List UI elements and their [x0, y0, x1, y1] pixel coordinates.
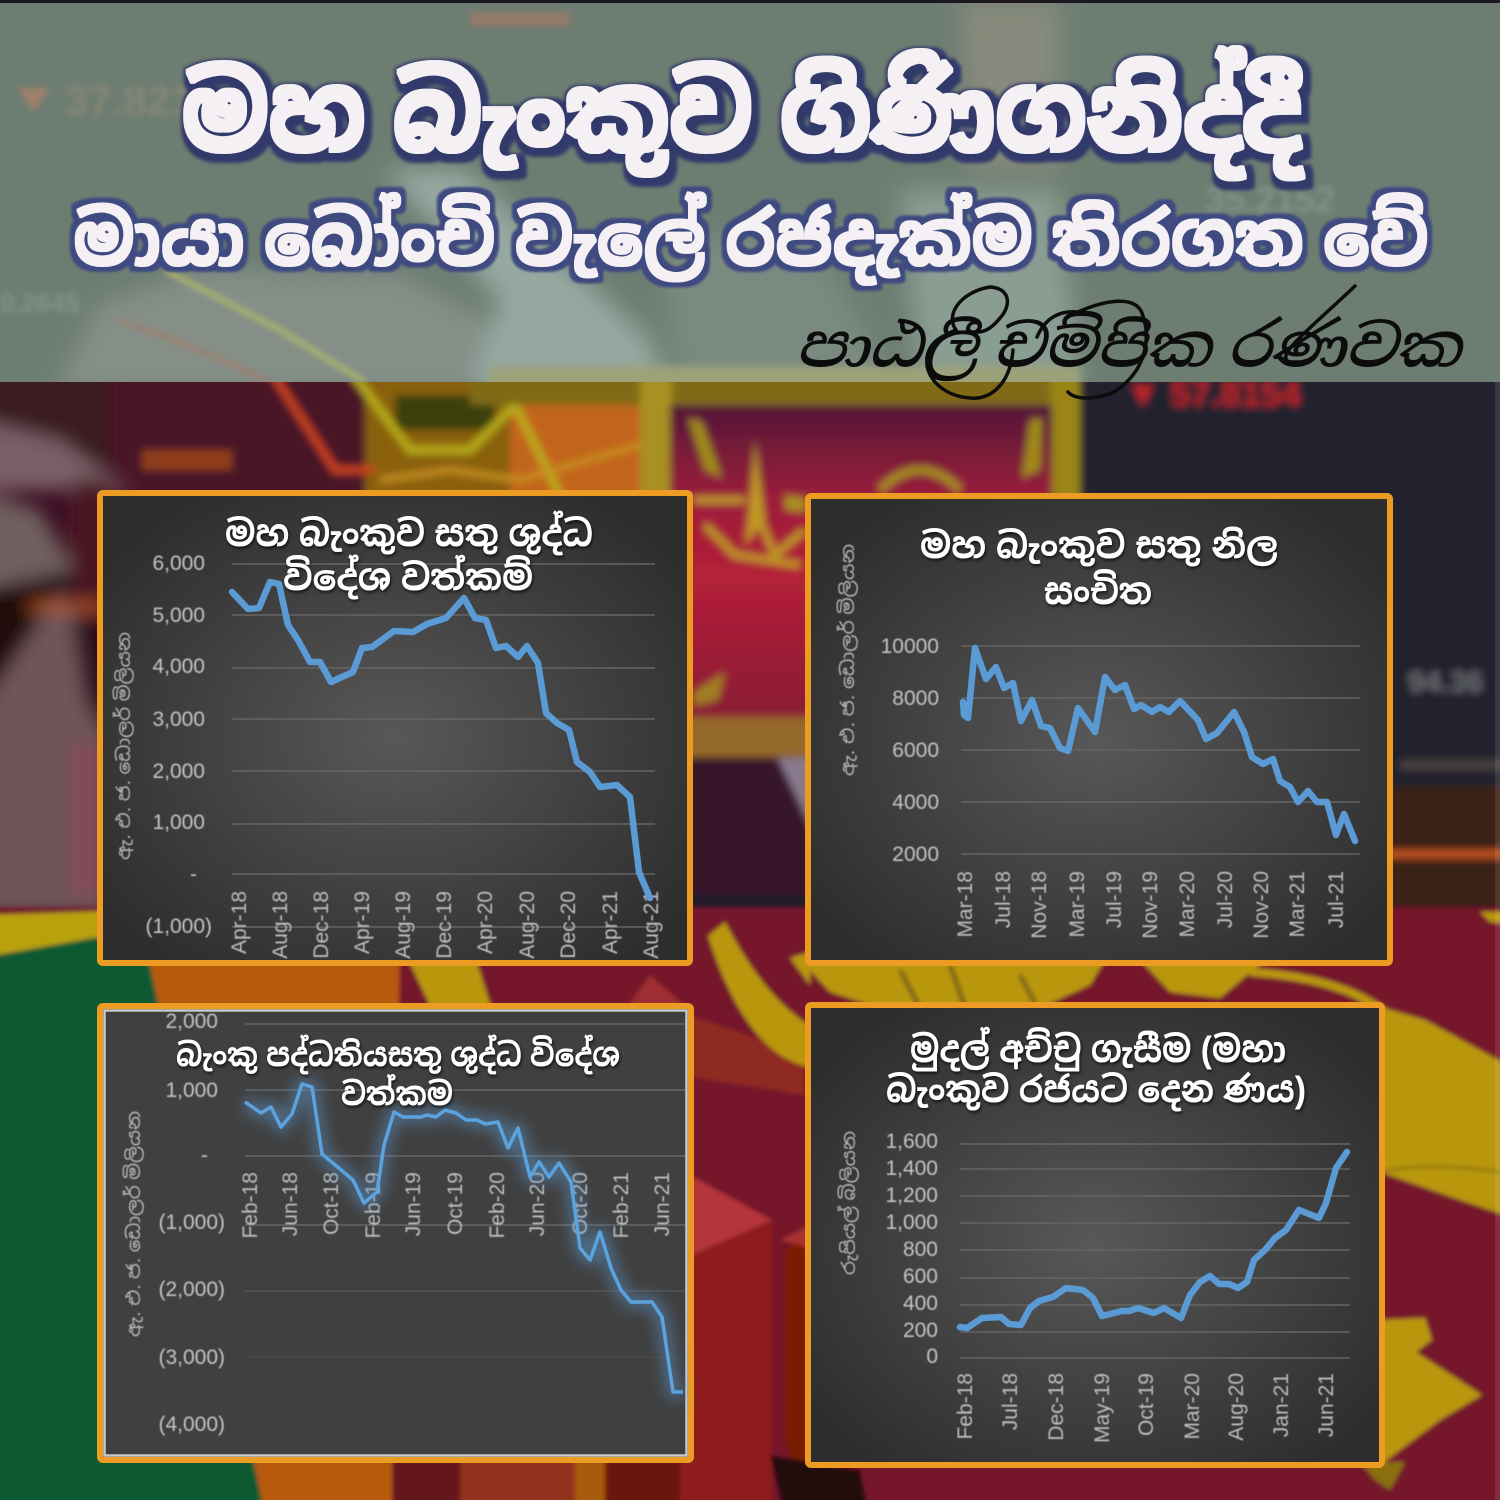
x axis labels: [239, 1172, 674, 1239]
panel: central bank net foreign assets: [100, 493, 690, 963]
chart title: විදේශ වත්කම්: [283, 554, 533, 600]
gridlines: [961, 646, 1360, 854]
y axis labels: (1,000): [145, 915, 212, 938]
chart title: [176, 1034, 620, 1112]
x axis labels: Oct-19: [444, 1172, 467, 1235]
top translucent band: [0, 0, 1500, 382]
hand at left edge: [0, 360, 130, 915]
x axis labels: Nov-20: [1250, 871, 1273, 939]
y axis title: රුපියල් බිලියන: [837, 1131, 859, 1275]
signature pen flourishes: [927, 286, 1355, 398]
chart title: බැංකුව රජයට දෙන ණය): [886, 1069, 1306, 1112]
chart title: වත්කම: [341, 1073, 453, 1112]
y axis labels: 3,000: [152, 708, 205, 731]
y axis labels: 8000: [892, 687, 939, 710]
signature text: පාඨලී චම්පික රණවක: [796, 311, 1463, 381]
y axis labels: -: [190, 863, 197, 886]
gridlines: [232, 564, 655, 927]
line series: [232, 582, 650, 898]
y axis labels: (1,000): [158, 1211, 225, 1234]
y axis labels: 800: [903, 1238, 938, 1261]
photo portion: [0, 360, 1500, 909]
chart title: [886, 1026, 1306, 1112]
orange chart area: [365, 375, 510, 500]
x axis labels: Oct-19: [1135, 1373, 1158, 1436]
chart title: මහ බැංකුව සතු ශුද්ධ: [225, 511, 593, 556]
title line 2: මායා බෝංචි වැලේ රජදැක්ම තිරගත වේ: [74, 193, 1428, 285]
x axis labels: [954, 871, 1348, 939]
y axis labels: (3,000): [158, 1346, 225, 1369]
y axis title: ඇ. එ. ජ. ඩොලර් මිලියන: [836, 544, 858, 776]
y axis labels: 600: [903, 1265, 938, 1288]
y axis labels: 2,000: [152, 760, 205, 783]
x axis labels: Dec-19: [433, 891, 456, 959]
chart title: මුදල් අච්චු ගැසීම (මහා: [910, 1026, 1286, 1072]
x axis labels: Jul-18: [999, 1373, 1022, 1430]
y axis labels: 4,000: [152, 655, 205, 678]
y axis labels: 1,200: [885, 1184, 938, 1207]
chart title: බැංකු පද්ධතියසතු ශුද්ධ විදේශ: [176, 1034, 620, 1075]
x axis labels: Feb-18: [954, 1373, 977, 1440]
y axis labels: 10000: [881, 635, 939, 658]
y axis labels: 1,000: [885, 1211, 938, 1234]
x axis labels: Aug-21: [640, 891, 663, 959]
x axis labels: Feb-19: [362, 1172, 385, 1239]
y axis labels: (4,000): [158, 1413, 225, 1436]
x axis labels: Feb-21: [610, 1172, 633, 1239]
x axis labels: Aug-20: [516, 891, 539, 959]
gridlines: [960, 1144, 1350, 1358]
x axis labels: Dec-18: [310, 891, 333, 959]
x axis labels: Feb-18: [239, 1172, 262, 1239]
x axis labels: Jun-21: [651, 1172, 674, 1236]
x axis labels: Jan-21: [1270, 1373, 1293, 1437]
x axis labels: Jul-18: [992, 871, 1015, 928]
y axis labels: 1,600: [885, 1130, 938, 1153]
x axis labels: Jun-20: [526, 1172, 549, 1236]
panel: central bank official reserves: [808, 496, 1390, 963]
top translucent band: 0.2645: [0, 288, 80, 318]
y axis labels: (2,000): [158, 1278, 225, 1301]
y axis title: ඇ. එ. ජ. ඩොලර් මිලියන: [122, 1111, 144, 1337]
x axis labels: Apr-18: [228, 891, 251, 954]
x axis labels: Oct-18: [320, 1172, 343, 1235]
y axis labels: 1,000: [152, 811, 205, 834]
title line 1: මහ බැංකුව ගිණිගනිද්දී: [182, 47, 1304, 180]
x axis labels: May-19: [1091, 1373, 1114, 1443]
x axis labels: Aug-19: [392, 891, 415, 959]
x axis labels: Mar-20: [1176, 871, 1199, 938]
x axis labels: Jun-19: [402, 1172, 425, 1236]
x axis labels: Dec-20: [557, 891, 580, 959]
chart title: [920, 525, 1278, 612]
lion shapes: [708, 922, 810, 1067]
ticker numerals: ▼ 57.8154: [1125, 373, 1301, 414]
chart title: [225, 511, 593, 600]
line series with glow: [245, 1084, 683, 1392]
y axis labels: 2,000: [165, 1010, 218, 1033]
line series: [963, 648, 1355, 841]
x axis labels: Apr-21: [599, 891, 622, 954]
x axis labels: Oct-20: [569, 1172, 592, 1235]
line series: [960, 1152, 1347, 1328]
x axis labels: Jun-21: [1315, 1373, 1338, 1437]
y axis labels: 6,000: [152, 552, 205, 575]
x axis labels: Apr-19: [351, 891, 374, 954]
right edge haze: [1495, 382, 1500, 1500]
x axis labels: Feb-20: [486, 1172, 509, 1239]
y axis labels: [158, 1010, 225, 1436]
x axis labels: Jul-21: [1325, 871, 1348, 928]
x axis labels: Nov-18: [1028, 871, 1051, 939]
ticker numerals: [1125, 373, 1483, 699]
y axis labels: 1,400: [885, 1157, 938, 1180]
y axis labels: -: [201, 1144, 208, 1167]
flag graphic: [470, 375, 1080, 405]
top translucent band: 35.2152: [1205, 179, 1335, 220]
x axis labels: Apr-20: [474, 891, 497, 954]
y axis labels: 4000: [892, 791, 939, 814]
x axis labels: Jul-19: [1103, 871, 1126, 928]
panel: money printing: [808, 1005, 1382, 1465]
title: [74, 47, 1428, 285]
y axis title: ඇ. එ. ජ. ඩොලර් මිලියන: [112, 632, 134, 860]
chart title: සංචිත: [1044, 568, 1152, 612]
panel: banking system net foreign assets: [100, 1006, 691, 1460]
x axis labels: Nov-19: [1139, 871, 1162, 939]
top translucent band: 37.8214: [65, 77, 217, 124]
x axis labels: Mar-18: [954, 871, 977, 938]
x axis labels: Mar-19: [1066, 871, 1089, 938]
author signature: [796, 286, 1463, 398]
x axis labels: Dec-18: [1045, 1373, 1068, 1441]
x axis labels: Jun-18: [279, 1172, 302, 1236]
x axis labels: Mar-20: [1181, 1373, 1204, 1440]
y axis labels: [881, 635, 939, 866]
x axis labels: Aug-20: [1225, 1373, 1248, 1441]
y axis labels: 1,000: [165, 1079, 218, 1102]
flag portion: [0, 908, 1500, 1500]
y axis labels: 2000: [892, 843, 939, 866]
x axis labels: Mar-21: [1286, 871, 1309, 938]
x axis labels: Aug-18: [269, 891, 292, 959]
y axis labels: [145, 552, 212, 938]
ticker numerals: 94.36: [1408, 666, 1483, 699]
y axis labels: 0: [926, 1345, 938, 1368]
x axis labels: Jul-20: [1214, 871, 1237, 928]
y axis labels: [885, 1130, 938, 1368]
y axis labels: 5,000: [152, 604, 205, 627]
gridlines: [245, 1024, 685, 1357]
x axis labels: [228, 891, 663, 959]
y axis labels: 400: [903, 1292, 938, 1315]
y axis labels: 200: [903, 1319, 938, 1342]
x axis labels: [954, 1373, 1338, 1443]
red blocks: [680, 1012, 805, 1095]
y axis labels: 6000: [892, 739, 939, 762]
chart title: මහ බැංකුව සතු නිල: [920, 525, 1278, 567]
